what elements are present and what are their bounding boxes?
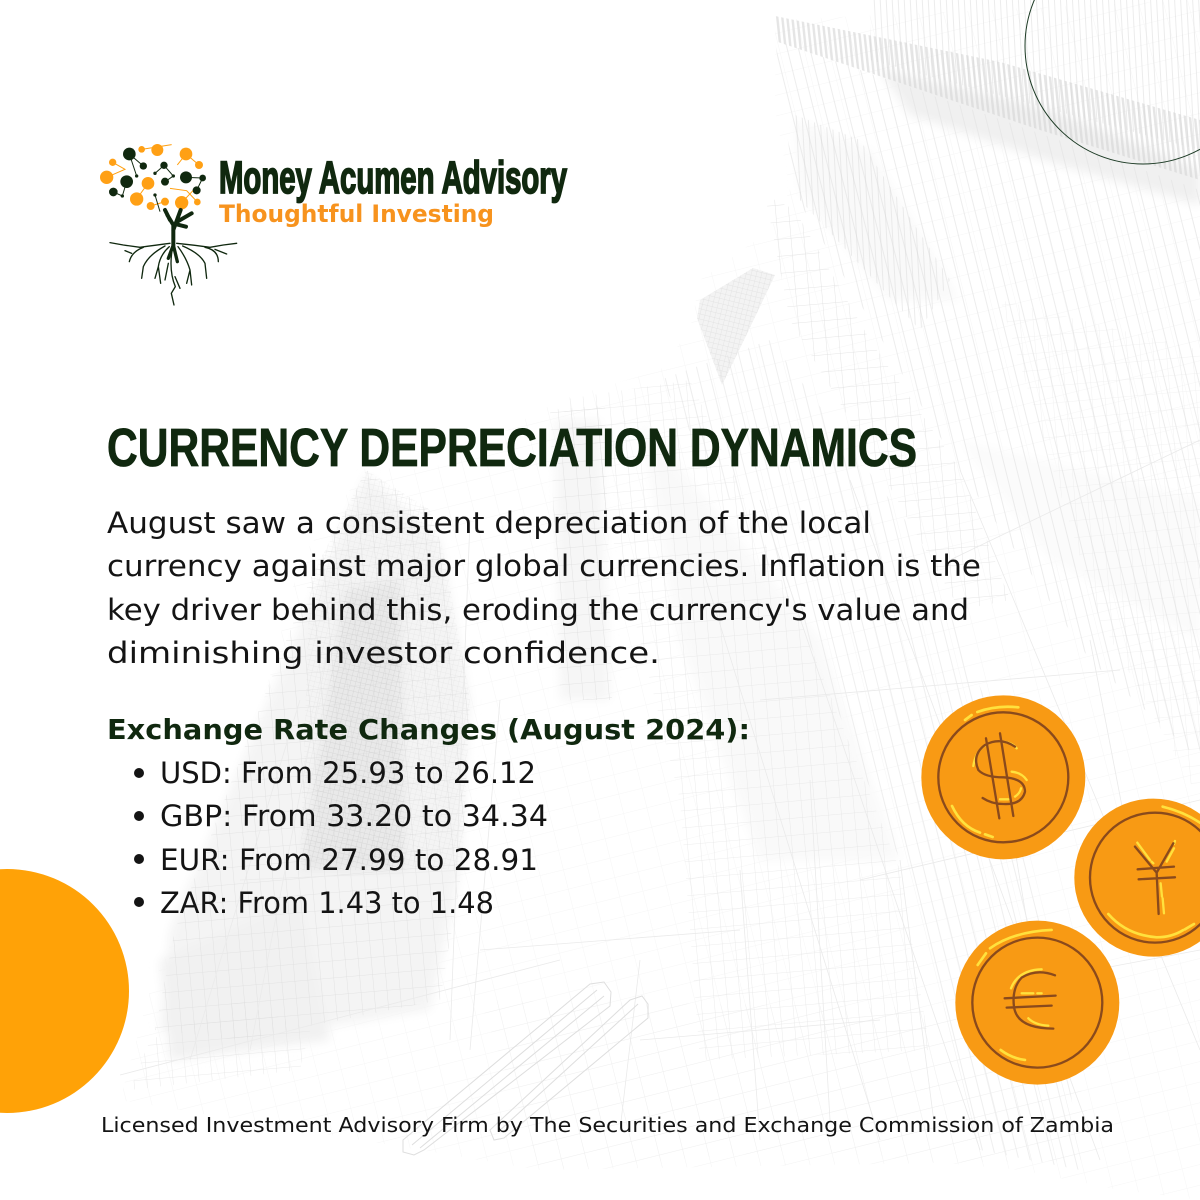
icon: dollar coin <box>921 695 1085 859</box>
exchange rate list: EUR: From 27.99 to 28.91 <box>160 843 538 877</box>
body paragraph: diminishing investor confidence. <box>107 636 660 670</box>
body paragraph: August saw a consistent depreciation of the local <box>107 506 871 540</box>
logo tagline: Thoughtful Investing <box>219 200 494 228</box>
body paragraph: currency against major global currencies. Inflation is the <box>107 549 981 583</box>
soft tones <box>160 70 1200 1060</box>
logo name: Money Acumen Advisory <box>219 152 567 203</box>
icon: yen coin <box>1074 799 1200 957</box>
title: CURRENCY DEPRECIATION DYNAMICS <box>107 418 917 478</box>
subheading: Exchange Rate Changes (August 2024): <box>107 713 750 746</box>
decorative thin circle top right <box>1025 0 1200 164</box>
exchange rate list: GBP: From 33.20 to 34.34 <box>160 799 548 833</box>
orange circle bottom left <box>0 869 129 1113</box>
body paragraph <box>107 506 981 670</box>
background: diagonal columns <box>403 982 648 1155</box>
icon: tree with roots <box>100 144 237 305</box>
exchange rate list: ZAR: From 1.43 to 1.48 <box>160 886 494 920</box>
footer text: Licensed Investment Advisory Firm by The Securities and Exchange Commission of Zambia <box>101 1113 1114 1137</box>
icon: euro coin <box>955 921 1119 1085</box>
logo <box>100 144 567 305</box>
exchange rate list <box>134 756 548 920</box>
body paragraph: key driver behind this, eroding the currency's value and <box>107 593 969 627</box>
exchange rate list: USD: From 25.93 to 26.12 <box>160 756 536 790</box>
